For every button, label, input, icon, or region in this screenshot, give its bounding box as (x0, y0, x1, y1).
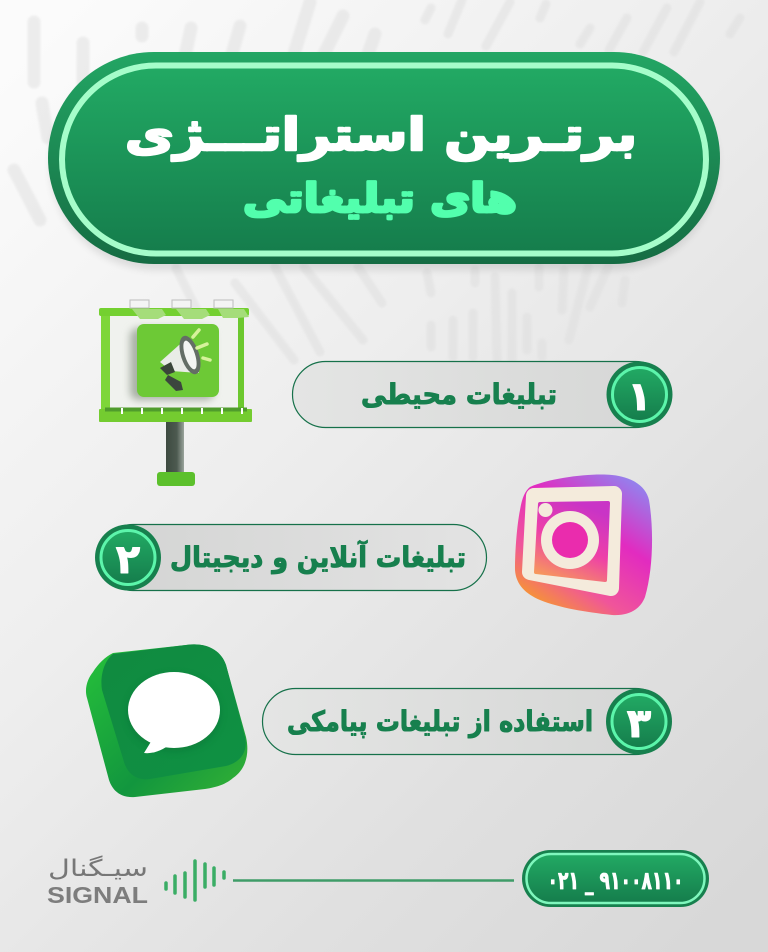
badge 1: ۱ (627, 374, 652, 420)
item 1: outdoor advertising (99, 300, 672, 486)
icon: billboard (99, 300, 252, 486)
item 3: SMS advertising (86, 644, 672, 797)
badge 3 (606, 688, 672, 754)
banner outer shape (48, 52, 720, 264)
badge 1 (606, 362, 672, 428)
label 1: تبلیغات محیطی (361, 378, 557, 411)
banner shadow (50, 58, 718, 270)
phone pill: ۰۲۱ _ ۹۱۰۰۸۱۱۰ (548, 866, 684, 895)
pill 3 (262, 688, 668, 754)
label 3: استفاده از تبلیغات پیامکی (287, 705, 593, 738)
banner inner fill and outline (62, 66, 706, 254)
logo persian wordmark: سیـگنال (48, 855, 148, 882)
badge 2: ۲ (116, 537, 140, 583)
pill 2 (100, 524, 486, 590)
signal logo (47, 855, 224, 908)
icon: instagram (515, 475, 652, 615)
icon: sound wave (166, 861, 224, 900)
footer (47, 850, 709, 908)
connector line (233, 879, 514, 882)
title line 2: های تبلیغاتی (243, 176, 517, 222)
title banner (48, 52, 720, 270)
badge 3: ۳ (627, 701, 651, 747)
phone pill (522, 850, 709, 907)
pill 1 (292, 362, 668, 428)
title line 1: برتـرین استراتـــژی (125, 108, 637, 161)
item 2: online and digital advertising (95, 475, 652, 615)
badge 2 (95, 524, 161, 590)
logo latin wordmark: SIGNAL (47, 882, 148, 908)
background pattern (14, 0, 740, 360)
label 2: تبلیغات آنلاین و دیجیتال (170, 540, 466, 574)
icon: message bubble (86, 644, 247, 797)
